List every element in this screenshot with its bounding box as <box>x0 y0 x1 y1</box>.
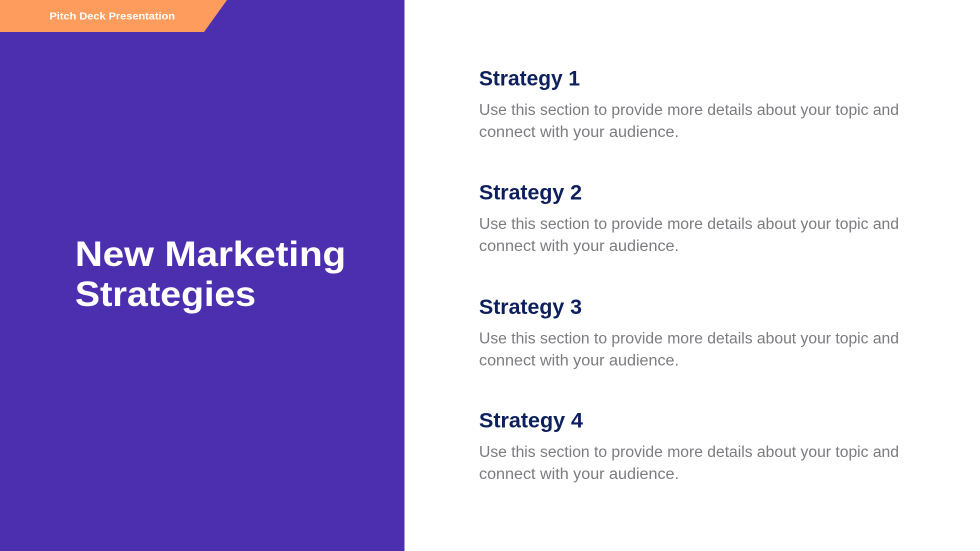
strategy 2 <box>479 182 899 255</box>
tag: pitch deck presentation <box>0 0 227 32</box>
title: Strategies <box>75 275 256 314</box>
title <box>75 235 346 314</box>
strategy 2: connect with your audience. <box>479 238 679 255</box>
strategy 4 <box>479 410 899 483</box>
strategy 3: Strategy 3 <box>479 296 582 319</box>
strategy 2: Use this section to provide more details about your topic and <box>479 216 899 233</box>
strategy 3 <box>479 296 899 370</box>
strategy 1 <box>479 68 899 141</box>
strategy 2: Strategy 2 <box>479 182 582 204</box>
strategy 1: connect with your audience. <box>479 124 679 141</box>
strategy 4: Strategy 4 <box>479 410 583 432</box>
strategy 1: Strategy 1 <box>479 68 580 90</box>
strategy 3: connect with your audience. <box>479 352 679 370</box>
strategy 4: Use this section to provide more details about your topic and <box>479 444 899 461</box>
title: New Marketing <box>75 235 346 274</box>
strategy 4: connect with your audience. <box>479 466 679 483</box>
strategy 3: Use this section to provide more details about your topic and <box>479 330 899 348</box>
strategy 1: Use this section to provide more details about your topic and <box>479 102 899 119</box>
panel: purple left panel <box>0 0 404 551</box>
tag: pitch deck presentation: Pitch Deck Presentation <box>50 10 175 22</box>
